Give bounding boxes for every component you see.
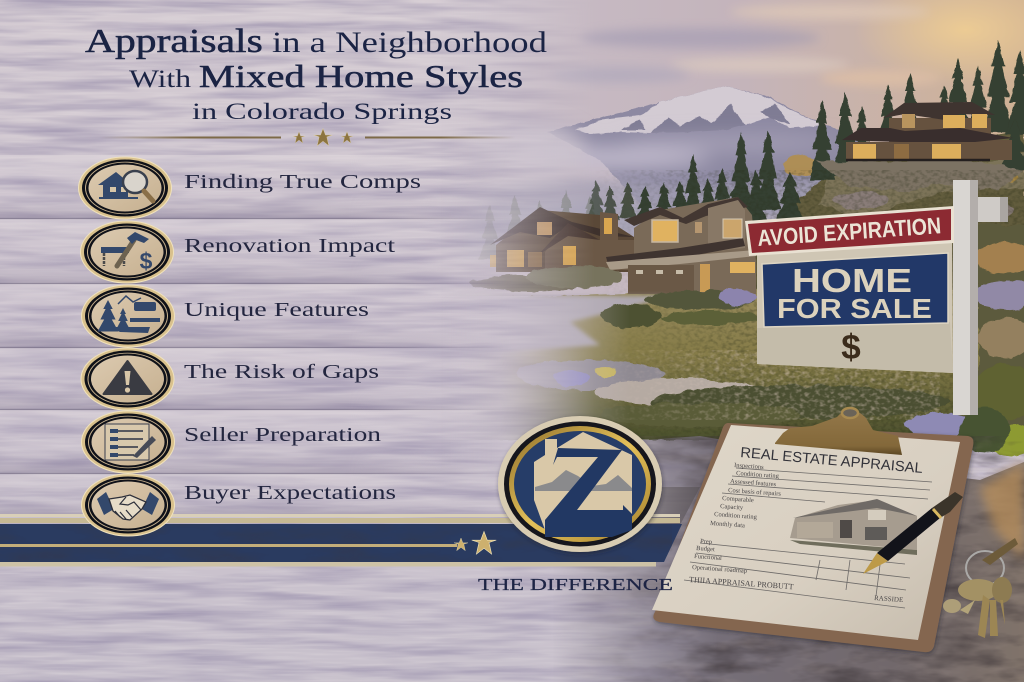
- form field labels: Inspections: [734, 462, 764, 471]
- shaded row bands behind the list: [0, 155, 456, 514]
- title: With Mixed Home Styles: [129, 58, 523, 94]
- label: Finding True Comps: [184, 171, 421, 193]
- form field labels: Prep: [700, 538, 712, 546]
- form field labels: Condition rating: [714, 511, 758, 521]
- sky with sunset clouds: [504, 0, 1024, 294]
- form field labels: Capacity: [720, 503, 744, 512]
- lawn: [503, 288, 980, 441]
- flower speckle: [626, 350, 940, 420]
- for sale sign: [745, 180, 1008, 415]
- label: Seller Preparation: [184, 424, 381, 446]
- dollar sign: $: [841, 328, 861, 367]
- list item: Seller Preparation: [82, 411, 381, 473]
- rocky ground: [564, 436, 1024, 682]
- sign post with cross arm: [953, 180, 1008, 415]
- label: Buyer Expectations: [184, 482, 396, 504]
- right garden beds: [905, 225, 1024, 456]
- Z letter: [545, 448, 632, 537]
- Z logo medallion: [498, 416, 662, 552]
- icon: handshake: [82, 474, 174, 536]
- form field labels: Budget: [696, 545, 715, 553]
- ribbon stars: [454, 532, 496, 554]
- icon: house with magnifier: [78, 157, 172, 219]
- landscape scene: [469, 0, 1024, 456]
- form field labels: Assessed features: [730, 478, 777, 488]
- icon: warning triangle: [81, 348, 174, 410]
- navy panel: Home for Sale: [762, 253, 948, 327]
- house and mountains: [534, 432, 632, 530]
- icon: hammer and dollar: [80, 221, 174, 283]
- title ornament: rule and stars: [100, 128, 515, 146]
- form heading: REAL ESTATE APPRAISAL: [740, 445, 923, 477]
- title: Appraisals in a Neighborhood: [85, 23, 547, 60]
- label: Unique Features: [184, 299, 369, 321]
- driveway: [510, 293, 660, 350]
- icon: hammer and dollar: $: [140, 248, 153, 274]
- form field labels: Condition rating: [736, 470, 780, 480]
- form field labels: Monthly data: [710, 520, 745, 529]
- label: The Risk of Gaps: [184, 361, 379, 383]
- form field labels: Cost basis of repairs: [728, 487, 782, 498]
- black and gold pen: [863, 492, 963, 574]
- list item: Finding True Comps: [78, 157, 421, 219]
- clipboard with appraisal form: [652, 408, 973, 652]
- form field labels: THIIA APPRAISAL PROBUTT: [689, 575, 794, 591]
- title: in Colorado Springs: [192, 99, 452, 124]
- form house illustration: [790, 499, 917, 555]
- form field labels: RASSIDE: [874, 594, 904, 604]
- list item: Renovation Impact: [80, 221, 396, 283]
- icon: checklist with pen: [82, 411, 174, 473]
- list item: The Risk of Gaps: [81, 348, 379, 410]
- icon: pines, mountains and tools: [82, 285, 174, 347]
- form field labels: [689, 462, 904, 604]
- navy panel: Home for Sale: FOR SALE: [777, 293, 932, 324]
- paper sheet: [652, 425, 960, 640]
- sign board: [757, 235, 953, 373]
- pine tree line: [586, 40, 1024, 227]
- section divider lines: [0, 218, 490, 474]
- form field lines: [684, 468, 932, 608]
- title: [85, 23, 547, 124]
- foliage speckle: [615, 170, 1024, 433]
- brass house keys: [943, 538, 1018, 638]
- gold clip: [775, 408, 902, 455]
- misty background trees: [479, 190, 601, 262]
- blurred mountain base and fog: [482, 178, 821, 247]
- navy panel: Home for Sale: HOME: [792, 262, 912, 299]
- bushes and flowers: [470, 266, 950, 427]
- hilltop retaining wall: [816, 160, 1024, 192]
- label: Renovation Impact: [184, 235, 396, 257]
- list item: Buyer Expectations: [82, 474, 396, 536]
- form field labels: Comparable: [722, 495, 754, 504]
- left craftsman house: [490, 207, 634, 272]
- snow-capped mountain: [548, 86, 860, 215]
- form field labels: Functional: [694, 553, 722, 562]
- list item: Unique Features: [82, 285, 369, 347]
- hilltop house: [842, 102, 1013, 160]
- hillside: [756, 132, 1024, 290]
- left fog over lawn: [448, 296, 622, 440]
- form field labels: Operational roadmap: [692, 564, 747, 575]
- red banner: Avoid Expiration: AVOID EXPIRATION: [757, 212, 942, 251]
- navy ribbon band: [0, 514, 682, 566]
- tagline: THE DIFFERENCE: [478, 575, 673, 594]
- clipboard board: [653, 423, 973, 652]
- centre two-storey house: [606, 197, 756, 294]
